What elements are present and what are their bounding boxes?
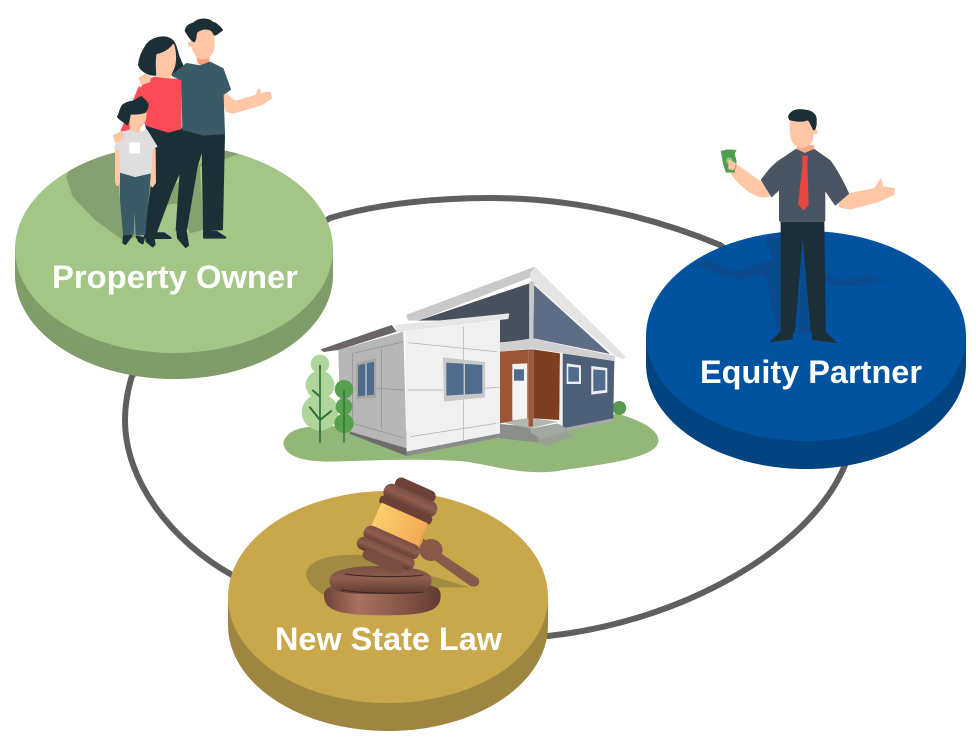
- fascia: [500, 338, 615, 361]
- gable right: [533, 285, 610, 354]
- label: property owner: Property Owner: [52, 259, 298, 295]
- porch bricks: [500, 349, 528, 423]
- panel: new state law disc: [228, 491, 548, 731]
- connecting ring: [125, 198, 845, 636]
- right windows: [567, 363, 581, 384]
- gable left: [418, 283, 529, 343]
- right wall: [563, 353, 614, 428]
- illustration: equity partner man: [695, 110, 894, 343]
- ground: [283, 413, 658, 472]
- man shadow: [695, 236, 888, 335]
- panel: property owner disc: [15, 145, 333, 379]
- side wall: [338, 332, 407, 452]
- steps: [500, 424, 538, 443]
- bush: [612, 401, 626, 415]
- white wall: [405, 321, 500, 452]
- tree left: [302, 355, 338, 443]
- front window: [443, 357, 485, 402]
- illustration: family: [66, 19, 271, 247]
- gavel head: [352, 471, 445, 579]
- handle: [421, 538, 479, 587]
- base: [324, 583, 441, 615]
- illustration: gavel: [306, 471, 479, 615]
- gavel shadow: [306, 555, 470, 603]
- label: new state law: New State Law: [275, 621, 502, 657]
- upper roof band: [406, 267, 537, 321]
- label: equity partner: Equity Partner: [700, 354, 922, 390]
- door: [512, 363, 527, 421]
- tree right: [334, 380, 354, 443]
- side window: [356, 358, 376, 399]
- illustration: house: [283, 267, 658, 472]
- panel: equity partner disc: [646, 231, 966, 469]
